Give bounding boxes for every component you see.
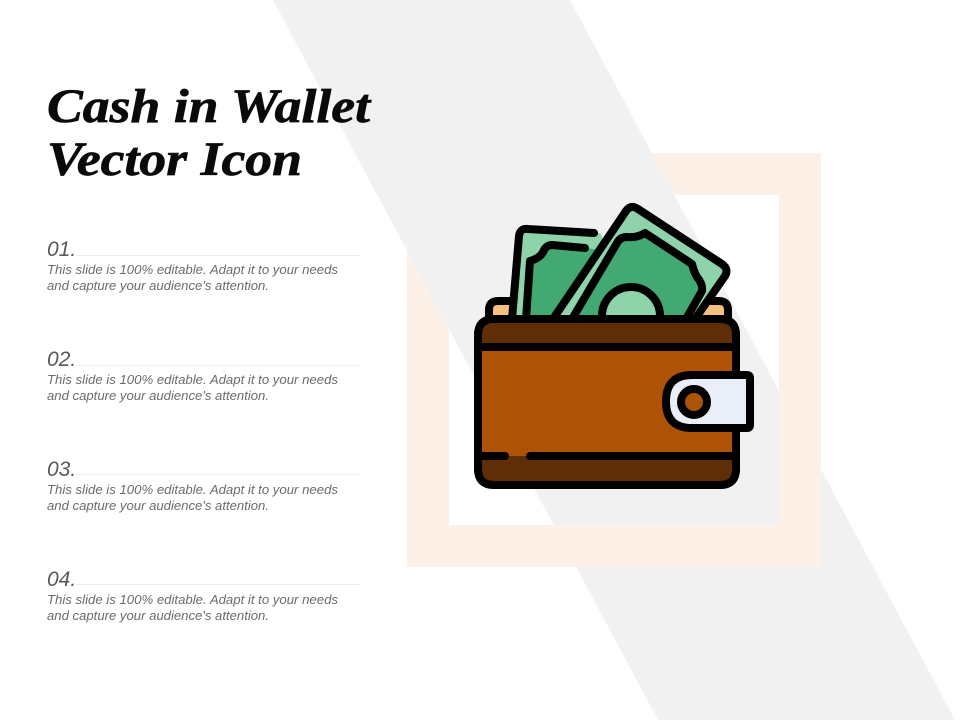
wallet clasp bbox=[666, 375, 750, 428]
list item 02: 02. bbox=[47, 348, 76, 371]
clasp snap button bbox=[681, 389, 707, 415]
list item 04: This slide is 100% editable. Adapt it to your needs bbox=[47, 592, 338, 607]
list item 01: and capture your audience's attention. bbox=[47, 278, 269, 293]
list item 02: This slide is 100% editable. Adapt it to your needs bbox=[47, 372, 338, 387]
wallet body bbox=[478, 319, 736, 485]
wallet bottom band bbox=[478, 440, 736, 485]
back banknote bbox=[512, 229, 606, 319]
wallet back flap bbox=[489, 301, 728, 319]
list item 04 bbox=[47, 568, 361, 623]
title: Vector Icon bbox=[47, 133, 302, 186]
front banknote bbox=[553, 207, 726, 345]
wallet top band bbox=[478, 319, 736, 347]
list item 01: This slide is 100% editable. Adapt it to your needs bbox=[47, 262, 338, 277]
list item 02: and capture your audience's attention. bbox=[47, 388, 269, 403]
list item 03: 03. bbox=[47, 458, 76, 481]
title: Cash in Wallet bbox=[47, 80, 372, 133]
list item 04: 04. bbox=[47, 568, 76, 591]
banknote medallion bbox=[602, 287, 660, 345]
list item 01 bbox=[47, 238, 361, 293]
list item 03: and capture your audience's attention. bbox=[47, 498, 269, 513]
list item 04: and capture your audience's attention. bbox=[47, 608, 269, 623]
list item 01: 01. bbox=[47, 238, 76, 261]
frame: right and bottom sides bbox=[407, 195, 821, 567]
list item 02 bbox=[47, 348, 361, 403]
title bbox=[47, 80, 372, 186]
diagonal background band bbox=[273, 0, 955, 720]
frame: top and left sides bbox=[407, 153, 821, 567]
icon: wallet with cash bbox=[478, 207, 750, 485]
list item 03 bbox=[47, 458, 361, 513]
list item 03: This slide is 100% editable. Adapt it to your needs bbox=[47, 482, 338, 497]
